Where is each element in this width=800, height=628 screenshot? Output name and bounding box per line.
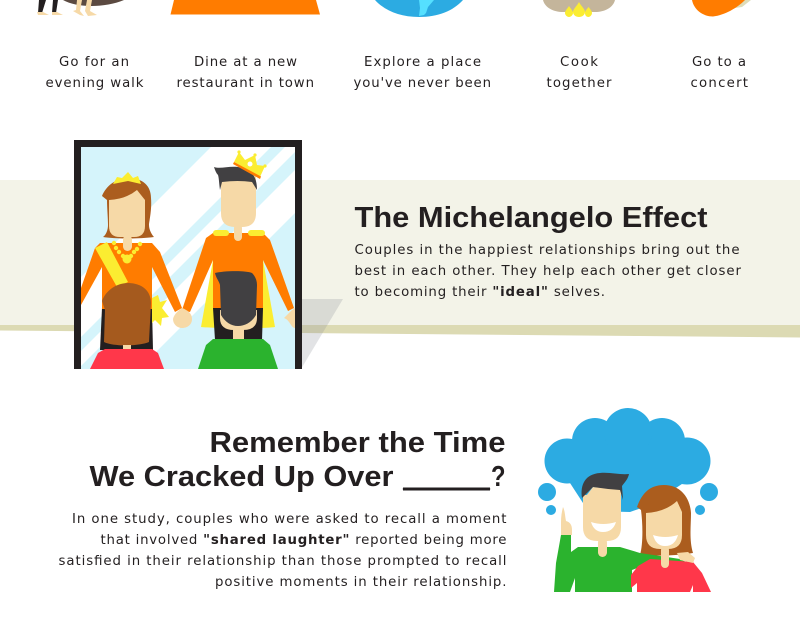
caption: evening walk: Go for an [59,55,129,70]
mirror shadow [301,299,343,369]
heading: The Michelangelo Effect: The Michelangelo Effect [354,202,708,234]
caption: evening walk [46,55,144,91]
illustration: mirror with royal couple reflection [74,140,302,369]
caption: concert: Go to a [692,55,746,70]
caption: new restaurant [176,55,314,91]
caption: evening walk: evening walk [46,76,144,91]
caption: cook together: Cook [560,55,598,70]
caption: new restaurant: restaurant in town [176,76,314,91]
text block: shared laughter study: satisfied in their relationship than those prompted to recall [58,554,507,569]
caption: concert: concert [690,76,748,91]
viewer: woman from behind [90,283,164,369]
icon: concert guitar [692,0,751,16]
caption: new restaurant: Dine at a new [194,55,297,70]
icon: restaurant awning [170,0,320,14]
text block: shared laughter study [58,512,507,590]
heading: Remember the Time: Remember the Time [210,427,506,459]
mirror glass [81,147,295,369]
text block: Michelangelo description: Couples in the happiest relationships bring out the [354,243,740,258]
text block: shared laughter study: positive moments in their relationship. [215,575,506,590]
caption: explore: you've never been [354,76,491,91]
text block: Michelangelo description: to becoming their "ideal" selves. [354,285,605,300]
heading: Remember the Time: ? [491,461,506,493]
reflection: queen [81,172,182,350]
text block: shared laughter study: that involved "shared laughter" reported being more [100,533,506,548]
caption: explore [354,55,491,91]
text block: Michelangelo description: best in each other. They help each other get closer [354,264,742,279]
woman hair [637,485,693,556]
woman face [646,501,682,549]
panel: Michelangelo band background [0,180,800,338]
reflection: king [182,150,295,340]
caption: explore: Explore a place [364,55,481,70]
icon: globe [375,0,463,17]
caption: concert [690,55,748,91]
caption: cook together: together [546,76,612,91]
caption: cook together [546,55,612,91]
text block: shared laughter study: In one study, couples who were asked to recall a moment [72,512,506,527]
heading: Remember the Time: ______ [402,461,491,493]
heading: Remember the Time: We Cracked Up Over [90,461,394,493]
heading: Remember the Time [90,427,506,493]
mirror frame [74,140,302,369]
viewer: man from behind [198,271,278,369]
icon: cooking pot with flames [543,0,615,17]
man laughing [554,473,690,592]
icon: walking couple legs [37,0,124,16]
illustration: couple with shared thought cloud [538,408,718,592]
thought cloud [538,408,718,515]
woman shirt and neck [631,546,711,592]
clasped hands [173,308,192,328]
text block: Michelangelo description [354,243,742,300]
